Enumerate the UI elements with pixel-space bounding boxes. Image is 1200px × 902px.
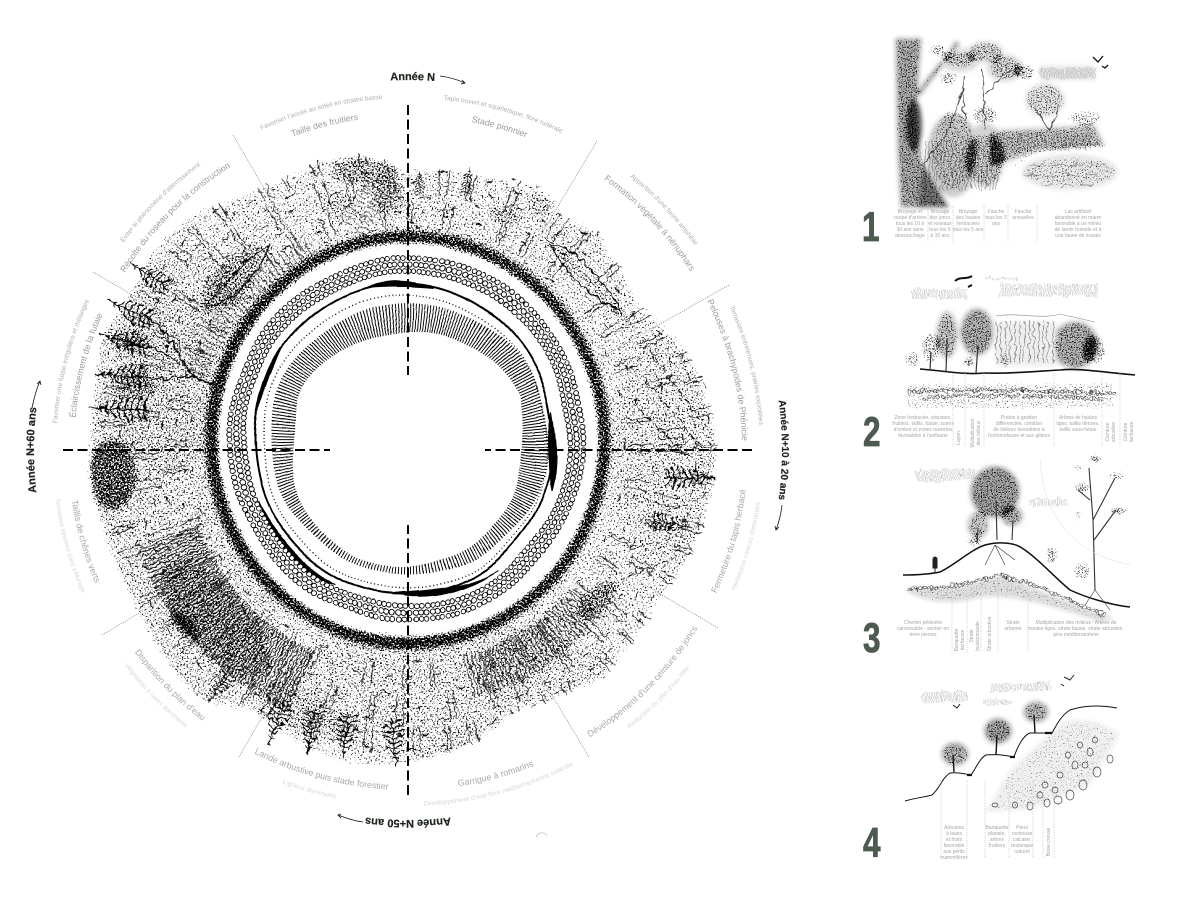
caption columns 3: Banquette [954,628,960,651]
caption columns 1: Broyage et [898,209,923,215]
caption columns 3: Multiplication des milieux : Arbres de [1036,620,1117,626]
caption columns 2: l'entomofaune et aux gibiers [988,433,1051,439]
caption columns 4: plantée, [988,831,1006,837]
label: Année N+50 ans: Année N+50 ans [366,818,450,828]
caption columns 4: arbres [990,837,1005,843]
caption columns 1: une faune de marais [1055,233,1101,239]
caption columns 1: Broyage [931,209,950,215]
caption columns 1: ans [992,221,1001,227]
caption columns 2: fruitiers, taillis, futaie, zones [892,421,954,427]
landscape ink texture [80,155,719,767]
caption columns 3: herbeuse [960,629,966,650]
caption columns 2: différenciée, création [996,421,1042,427]
hill profile and trees [903,460,1130,610]
sector: garrigue: Garrigue à romarins [458,762,534,786]
label: Année N+60 ans: Année N+60 ans [26,408,36,492]
caption columns 2: Multiplication [970,418,976,447]
caption columns 1: Broyage [959,209,978,215]
caption columns 4: restanque [1011,843,1033,849]
fir trees [90,165,717,767]
caption columns 2: d'ombre et zones ouvertes [894,427,953,433]
caption columns 2: des milieux [976,420,982,446]
caption columns 1: et roseaux [928,221,952,227]
caption columns 1: abandonné en marre [1055,215,1101,221]
panel 3: hill section [863,454,1130,661]
sector: ceinture de joncs: Développement d'une ceinture de joncs [587,626,697,737]
caption columns 2: taillis sous-futaie [1060,427,1097,433]
caption columns 3: terre pierres [910,632,937,638]
illustration 3 tones [908,466,1115,622]
caption columns 1 [894,205,1102,243]
sector: taille des fruitiers: Taille des fruitiers [290,115,358,136]
sector note: faune amphibie: Apparition d'une faune amphibie [630,174,697,245]
sector note: herbacées: Herbacées vivaces dominantes [731,502,760,590]
caption columns 4: rocheuse [1012,831,1032,837]
illustration 2 ink [904,308,1115,410]
sector: disparition: Disparition du plan d'eau [135,649,205,720]
landscape pen strokes [90,141,717,767]
sector: pelouses: Pelouses à brachypodes de Phénicie [707,299,748,440]
caption columns 1: Fauche [1015,209,1032,215]
caption columns 2: Prairie à gestion [1001,415,1037,421]
sector note: éviter: Éviter le phénomène d'atterrissement [120,162,200,242]
caption columns 1: Lac artificiel [1065,209,1091,215]
caption columns 2: Zone herbacée, arbustes, [895,415,951,421]
stipple rings [213,238,603,642]
caption columns 2: favorables à l'avifaune [898,433,948,439]
caption columns 3: pins méditerranéens [1053,632,1099,638]
caption columns 2: Ceinture [1123,422,1129,441]
ground line and trunks [920,314,1135,375]
sector note: ligneux: Ligneux dominants [283,779,336,798]
sector: taillis: Taillis de chênes verts [72,500,99,583]
caption columns 1: favorable à un milieu [1055,221,1101,227]
caption columns 4: Bisse creusé [1046,827,1052,856]
person [933,557,937,572]
illustration 1 tones [895,38,1118,208]
caption columns 3 [897,593,1124,653]
illustration 3 ink [908,454,1128,622]
caption columns 4: Arbustes [944,825,964,831]
caption columns 1: des hautes [956,215,981,221]
sector note: carex: Végétation à carex dominante [126,662,187,728]
upper and side sector labels [52,95,764,440]
panel 4: terraces section [863,675,1120,866]
caption columns 2: Arbres de hautes [1059,415,1098,421]
caption columns 3: arborée [1004,626,1022,632]
caption columns 4: favorable [944,843,964,849]
caption columns 4: à baies [946,831,963,837]
thin dotted ring [263,295,547,589]
illustration 2 tones [936,308,1099,369]
arrow: Année N+60 [32,381,41,408]
caption columns 1: de lande humide et à [1055,227,1102,233]
clouds 2 [912,279,1098,294]
caption columns 1: tous les 5 [929,227,951,233]
caption columns 4: Paroi [1016,825,1028,831]
caption columns 2: de lisières favorables à [993,427,1045,433]
caption columns 2: tiges, taillis denses, [1056,421,1100,427]
caption columns 4: fruitiers [989,843,1006,849]
caption columns 1: herbacées [956,221,980,227]
year labels [26,72,790,828]
sector: éclaircissement: Éclaircissement de la futaie [68,314,102,417]
illustration 1 lines [922,70,1110,185]
caption columns 1: Fauche [988,209,1005,215]
sector: récolte du roseau: Récolte du roseau pour la construction [120,164,230,272]
caption columns 1: tous les 10 à [896,221,924,227]
label: Année N: Année N [390,72,435,81]
central white blob [293,333,523,567]
terrace profile [905,706,1117,801]
caption columns 1: dessouchage [895,233,925,239]
number 1: 1 [862,203,880,250]
sector: formation végétale: Formation végétale à nénuphars [604,175,694,271]
caption columns 4: naturel [1014,849,1030,855]
arrow: Année N+10 [775,505,782,530]
caption columns 1: des joncs [929,215,951,221]
sector note: flore méditerranéenne: Développement d'une flore méditerranéenne rudérale [424,762,573,806]
pebble ring [231,258,583,620]
panel 1: lake [862,38,1118,250]
sector note: réduction: Réduction du plan d'eau libre [627,666,689,728]
sector divider lines [93,135,729,757]
arrow: Année N+50 [338,814,363,822]
sector note: futaie irrégulière: Favoriser une futaie irrégulière et mélangée [52,300,89,423]
caption columns 2 [892,373,1135,447]
caption columns 1: 30 ans sans [897,227,924,233]
sector: fermeture du tapis: Fermeture du tapis herbacé [711,490,746,593]
black water line [255,281,556,597]
caption columns 2: herbacée [1129,421,1135,442]
caption columns 1: à 10 ans [930,233,950,239]
label: Année N+10 à 20 ans: Année N+10 à 20 ans [778,400,790,500]
caption columns 3: Strate arbustive [987,616,993,652]
caption columns 4: Banquette [986,825,1009,831]
number 2: 2 [863,408,881,455]
sector note: terrasses entretenues: Terrasses entretenues, prairies exploitées [730,305,764,425]
caption columns 2: Layon [956,431,962,445]
number 4: 4 [863,819,881,866]
illustration 4 ink [941,701,1120,812]
number 3: 3 [863,614,881,661]
caption columns 4: mammifères [940,855,968,861]
caption columns 1: coupe d'arbres [894,215,927,221]
concentric central rings [231,258,583,620]
caption columns 2: Ceinture [1105,422,1111,441]
birds [953,675,1074,708]
pebble layer 2 [910,390,1115,399]
reed hatching sectors [168,180,700,681]
illustration 1 ink [895,38,1118,208]
caption columns 3: Strate [969,629,975,643]
caption columns 4: et fruits [946,837,963,843]
panel 2: section through woodland [863,276,1135,455]
lower sector labels [56,490,760,806]
caption columns 3: Strate [1006,620,1020,626]
caption columns 2: arbustive [1111,422,1117,442]
sector note: tapis ouvert: Tapis ouvert et squelettique, flore rudérale [444,95,562,133]
caption columns 3: Chemin pédestre [904,620,942,626]
caption columns 1: tous les 5 ans [953,227,984,233]
sector: stade pionnier: Stade pionnier [472,116,528,137]
caption columns 4: calcaire, [1013,837,1031,843]
bird [955,276,972,287]
caption columns 3: carrossable : sentier en [897,626,949,632]
small arc mark [536,833,547,837]
caption columns 3: buissonnante [975,621,981,651]
caption columns 4 [940,780,1054,861]
caption columns 3: hautes tiges, strate basse, strate arbustive, [1028,626,1124,632]
radial hatch ring [291,324,527,554]
clouds 4 [922,686,1050,702]
clouds and pebbles 3 [908,474,1105,615]
sector note: terrasses: Terrasses laissées sans pâturage [56,498,85,592]
axis dashed lines [63,105,752,795]
caption columns 1: annuelles [1012,215,1034,221]
sector: lande arbustive: Lande arbustive puis stade forestier [254,748,388,790]
caption columns 4: aux petits [943,849,965,855]
boulders [992,737,1113,810]
birds [1093,56,1108,68]
landscape wheel illustration [80,141,719,767]
caption columns 1: tous les 3 [985,215,1007,221]
branching tree [125,312,215,385]
sector note: favoriser l'accès: Favoriser l'accès au soleil en strates basse [260,96,382,130]
illustration 4 tones [941,701,1120,812]
arrow: Année N [440,76,465,84]
